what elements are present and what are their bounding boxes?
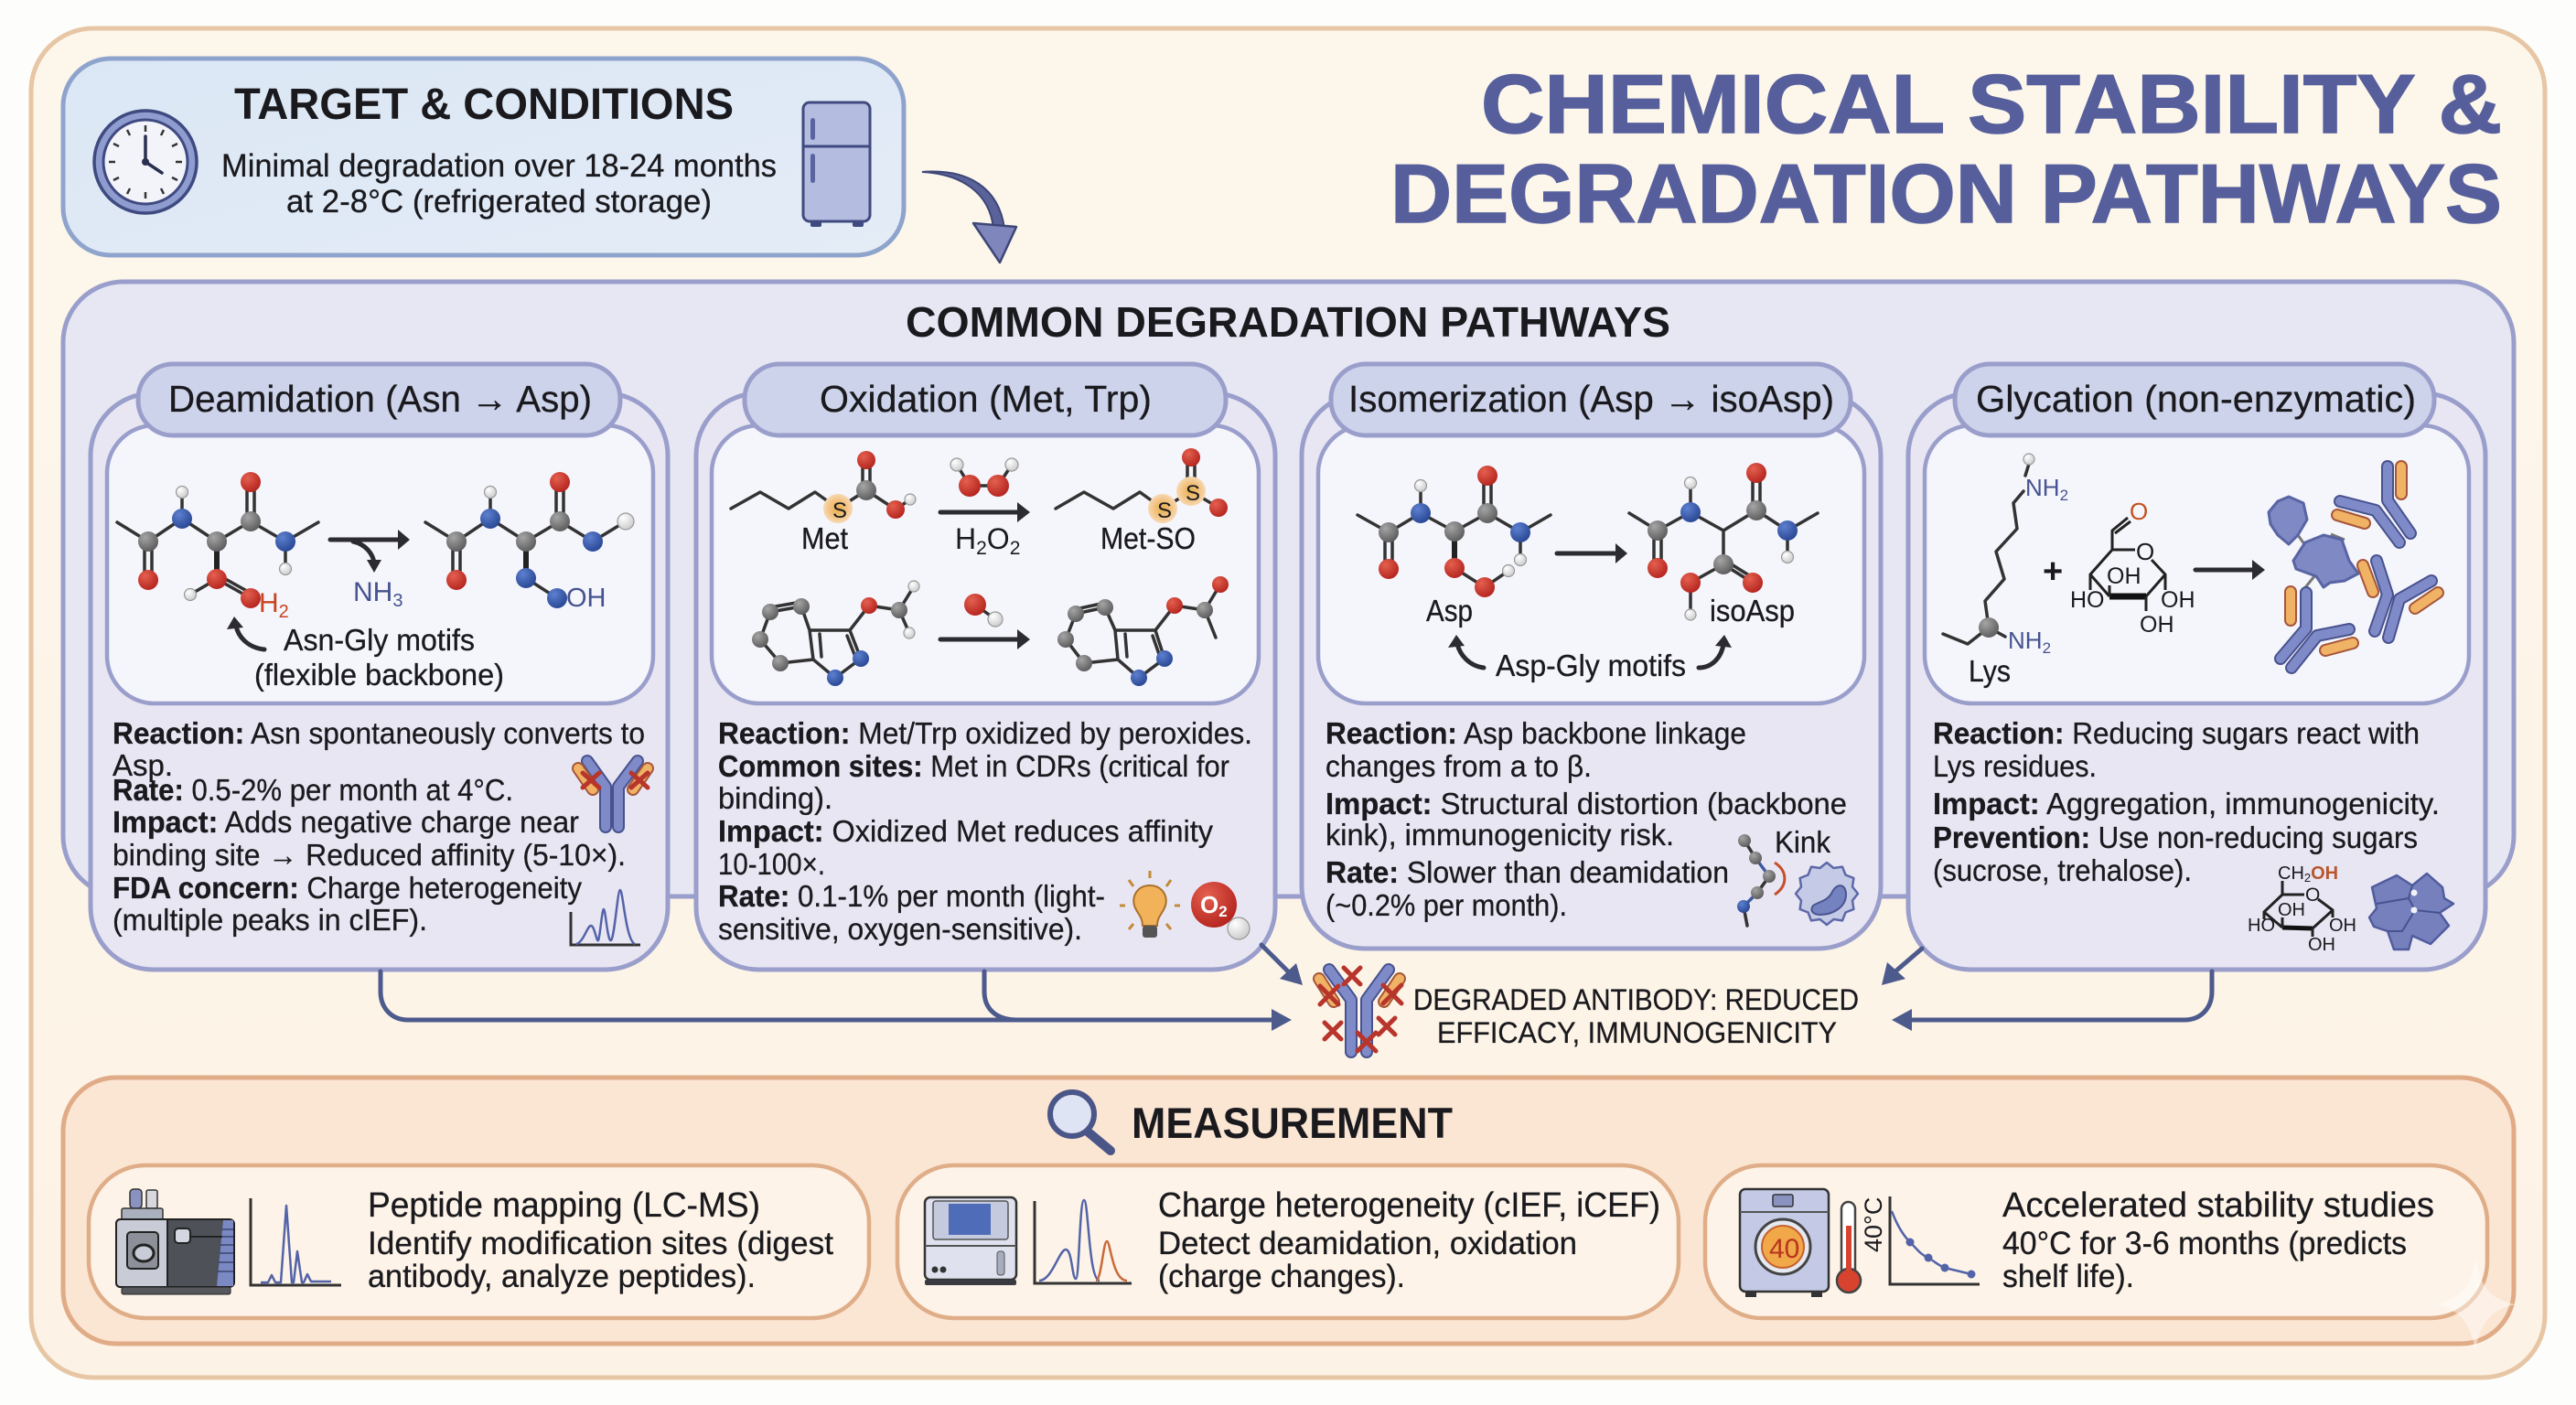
icon: oxygen atom: 2 [1218, 903, 1228, 920]
heading: glycation pill [1955, 364, 2434, 435]
diagram: aspartate molecule: Asp [1426, 594, 1473, 627]
text: deamidation details: Impact: Adds negative charge near [113, 805, 579, 839]
diagram: lysine: 2 [2043, 639, 2051, 657]
icon: non-reducing sugar: CH [2278, 863, 2304, 884]
callout: Asp-Gly motifs [1448, 635, 1732, 682]
heading: target and conditions: TARGET & CONDITIONS [234, 80, 734, 129]
icon: stability chamber [1740, 1189, 1829, 1297]
text: deamidation details: (multiple peaks in cIEF). [113, 903, 427, 937]
card: peptide mapping [89, 1165, 869, 1318]
text: oxidation details: Rate: 0.1-1% per month (light- [718, 879, 1105, 913]
panel: glycation [1908, 364, 2485, 970]
diagram: asparagine molecule: H [259, 588, 279, 618]
diagram: lysine: NH [2008, 627, 2043, 654]
diagram: methionine molecule: Met [801, 521, 848, 555]
arrow: glycation diagonal [1882, 949, 1922, 985]
arrow: isomerization reaction [1557, 543, 1627, 563]
icon: immune cell [1796, 863, 1858, 925]
text: deamidation details [113, 716, 645, 937]
arrow: deamidation reaction releasing NH3: NH [353, 577, 392, 607]
diagram: methionine molecule: S [832, 499, 847, 523]
text: oxidation details: sensitive, oxygen-sensitive). [718, 912, 1082, 946]
icon: oxygen atom: O [1200, 891, 1218, 918]
card: accelerated stability [1705, 1165, 2487, 1318]
arrow: target to pathways [922, 172, 1016, 263]
text: charge heterogeneity: Detect deamidation, oxidation [1158, 1226, 1577, 1261]
panel: target and conditions [63, 59, 904, 255]
icon: oxygen atom [1191, 882, 1250, 939]
callout: Asn-Gly motifs: (flexible backbone) [254, 658, 504, 692]
text: peptide mapping: Identify modification sites (digest [368, 1226, 833, 1261]
title: DEGRADATION PATHWAYS [1390, 148, 2502, 241]
icon: LC-MS instrument [116, 1189, 234, 1294]
diagram: methionine sulfoxide: Met-SO [1100, 521, 1196, 555]
text: charge heterogeneity: (charge changes). [1158, 1259, 1405, 1294]
icon: light bulb [1120, 871, 1180, 938]
icon: non-reducing sugar: OH [2278, 900, 2305, 920]
text: isomerization details: kink), immunogenicity risk. [1326, 818, 1674, 852]
icon: thermometer: 40°C [1860, 1197, 1887, 1252]
text: degraded antibody outcome: EFFICACY, IMMUNOGENICITY [1437, 1016, 1837, 1049]
callout: Asp-Gly motifs: Asp-Gly motifs [1496, 649, 1686, 682]
icon: stability chamber: 40 [1769, 1234, 1799, 1264]
heading: deamidation pill: Deamidation (Asn → Asp) [168, 378, 592, 420]
panel: common degradation pathways background [63, 282, 2514, 896]
icon: backbone kink: Kink [1775, 825, 1830, 859]
text: charge heterogeneity [1158, 1186, 1660, 1294]
icon: backbone kink [1737, 825, 1830, 926]
diagram: methionine sulfoxide [1056, 448, 1228, 555]
text: oxidation details: Impact: Oxidized Met reduces affinity [718, 814, 1213, 848]
heading: deamidation pill [138, 364, 620, 435]
icon: magnifying glass [1050, 1092, 1111, 1151]
icon: cIEF chromatogram [571, 890, 640, 945]
panel: isomerization [1302, 364, 1881, 949]
diagram: glucose: O [2130, 498, 2148, 525]
callout: Asn-Gly motifs [227, 617, 504, 692]
text: accelerated stability: 40°C for 3-6 months (predicts [2002, 1226, 2407, 1261]
text: oxidation details: 10-100×. [718, 847, 825, 881]
text: oxidation details: binding). [718, 781, 832, 815]
diagram: aggregated antibodies [2269, 467, 2438, 668]
text: isomerization details: Reaction: Asp backbone linkage [1326, 716, 1746, 750]
diagram: lysine: NH [2025, 474, 2060, 501]
text: target description: at 2-8°C (refrigerated storage) [286, 184, 712, 220]
icon: non-reducing sugar: OH [2311, 863, 2338, 884]
card: charge heterogeneity [897, 1165, 1679, 1318]
arrow: glycation to degraded antibody [1892, 971, 2212, 1031]
text: deamidation details: Rate: 0.5-2% per month at 4°C. [113, 773, 513, 807]
text: isomerization details [1326, 716, 1847, 922]
panel: oxidation [696, 364, 1275, 970]
diagram: methionine sulfoxide: S [1186, 481, 1200, 506]
diagram: isoaspartate molecule: isoAsp [1710, 594, 1795, 627]
arrow: oxidation to degraded antibody [984, 971, 1017, 1020]
text: oxidation details: Reaction: Met/Trp oxidized by peroxides. [718, 716, 1252, 750]
diagram: lysine: 2 [2060, 487, 2068, 504]
text: isomerization details: Rate: Slower than deamidation [1326, 855, 1729, 889]
text: glycation details [1933, 716, 2440, 887]
text: deamidation details: binding site → Reduced affinity (5-10×). [113, 838, 626, 872]
heading: common degradation pathways: COMMON DEGRADATION PATHWAYS [906, 298, 1670, 346]
icon: refrigerator [803, 102, 870, 227]
diagram: glucose: OH [2140, 612, 2174, 638]
text: peptide mapping [368, 1186, 833, 1294]
diagram: hydrogen peroxide arrow [940, 458, 1030, 559]
icon: LC-MS chromatogram [251, 1198, 341, 1285]
icon: non-reducing sugar: HO [2248, 916, 2275, 936]
text: oxidation details: Common sites: Met in CDRs (critical for [718, 749, 1229, 783]
text: target description [221, 148, 777, 220]
text: glycation details: Lys residues. [1933, 749, 2097, 783]
icon: charge heterogeneity chromatogram [1035, 1200, 1132, 1283]
icon: degradation curve [1890, 1196, 1980, 1284]
callout: Asn-Gly motifs: Asn-Gly motifs [284, 623, 475, 657]
text: peptide mapping: antibody, analyze peptides). [368, 1259, 756, 1294]
diagram: aspartate molecule [1358, 466, 1551, 627]
heading: oxidation pill: Oxidation (Met, Trp) [820, 378, 1152, 420]
diagram: hydrogen peroxide arrow: 2 [1010, 538, 1020, 559]
diagram: hydrogen peroxide arrow: O [987, 522, 1010, 555]
diagram: glucose: OH [2107, 563, 2141, 589]
text: accelerated stability: shelf life). [2002, 1259, 2134, 1294]
arrow: deamidation to degraded antibody [381, 971, 1292, 1031]
arrow: deamidation reaction releasing NH3: 3 [392, 591, 402, 611]
heading: isomerization pill: Isomerization (Asp → isoAsp) [1348, 378, 1834, 420]
diagram: aspartate molecule [425, 472, 634, 613]
heading: glycation pill: Glycation (non-enzymatic) [1976, 378, 2416, 420]
heading: oxidation pill [745, 364, 1226, 435]
text: oxidation details [718, 716, 1252, 946]
text: charge heterogeneity: Charge heterogeneity (cIEF, iCEF) [1158, 1186, 1660, 1225]
diagram: hydrogen peroxide arrow: H [955, 522, 976, 555]
watermark: sparkle [2435, 1259, 2516, 1350]
text: accelerated stability: Accelerated stability studies [2002, 1186, 2434, 1225]
text: target description: Minimal degradation over 18-24 months [221, 148, 777, 184]
label: plus sign: + [2043, 552, 2063, 591]
diagram: aspartate molecule: OH [566, 584, 606, 613]
text: deamidation details: Asp. [113, 748, 173, 782]
text: degraded antibody outcome [1413, 983, 1859, 1049]
diagram: lysine [1943, 454, 2068, 688]
diagram: methionine molecule [731, 451, 916, 555]
text: glycation details: Reaction: Reducing sugars react with [1933, 716, 2420, 750]
heading: isomerization pill [1331, 364, 1851, 435]
arrow: glycation reaction [2195, 560, 2265, 580]
diagram: lysine: Lys [1969, 654, 2011, 688]
icon: damaged antibody [578, 761, 648, 827]
text: isomerization details: changes from a to β. [1326, 749, 1592, 783]
panel: measurement [63, 1078, 2514, 1344]
text: peptide mapping: Peptide mapping (LC-MS) [368, 1186, 760, 1225]
icon: degraded antibody [1319, 968, 1401, 1052]
text: glycation details: Prevention: Use non-reducing sugars [1933, 820, 2418, 854]
title [1390, 59, 2502, 241]
arrow: deamidation reaction releasing NH3 [330, 530, 410, 611]
diagram: glucose: HO [2070, 587, 2104, 613]
text: glycation details: (sucrose, trehalose). [1933, 853, 2192, 887]
title: CHEMICAL STABILITY & [1481, 59, 2502, 151]
arrow: oxidation diagonal [1261, 945, 1303, 985]
diagram: asparagine molecule: 2 [279, 602, 289, 622]
icon: thermometer [1837, 1197, 1887, 1292]
diagram: hydroxyl reaction arrow [940, 594, 1030, 649]
diagram: methionine sulfoxide: S [1157, 499, 1172, 523]
icon: non-reducing sugar [2248, 863, 2356, 955]
icon: non-reducing sugar: OH [2308, 935, 2335, 955]
diagram: glucose: O [2136, 538, 2154, 565]
icon: non-reducing sugar: O [2305, 885, 2320, 906]
icon: non-reducing sugar: OH [2329, 916, 2356, 936]
text: isomerization details: Impact: Structural distortion (backbone [1326, 787, 1847, 820]
diagram: glucose: OH [2161, 587, 2195, 613]
icon: protein aggregate [2369, 874, 2453, 949]
diagram: hydrogen peroxide arrow: 2 [976, 538, 987, 559]
text: glycation details: Impact: Aggregation, immunogenicity. [1933, 787, 2440, 820]
icon: cIEF instrument [925, 1197, 1016, 1285]
text: accelerated stability [2002, 1186, 2434, 1294]
icon: clock [94, 111, 197, 213]
text: degraded antibody outcome: DEGRADED ANTIBODY: REDUCED [1413, 983, 1859, 1016]
diagram: tryptophan molecule [752, 581, 919, 686]
diagram: asparagine molecule [117, 472, 318, 622]
text: isomerization details: (~0.2% per month). [1326, 888, 1567, 922]
text: deamidation details: FDA concern: Charge heterogeneity [113, 871, 582, 905]
diagram: oxidized tryptophan [1057, 576, 1229, 686]
panel: deamidation [91, 364, 668, 970]
diagram: glucose [2070, 498, 2195, 638]
diagram: isoaspartate molecule [1629, 463, 1818, 627]
icon: non-reducing sugar: 2 [2304, 871, 2311, 885]
heading: measurement: MEASUREMENT [1132, 1099, 1453, 1147]
text: deamidation details: Reaction: Asn spontaneously converts to [113, 716, 645, 750]
